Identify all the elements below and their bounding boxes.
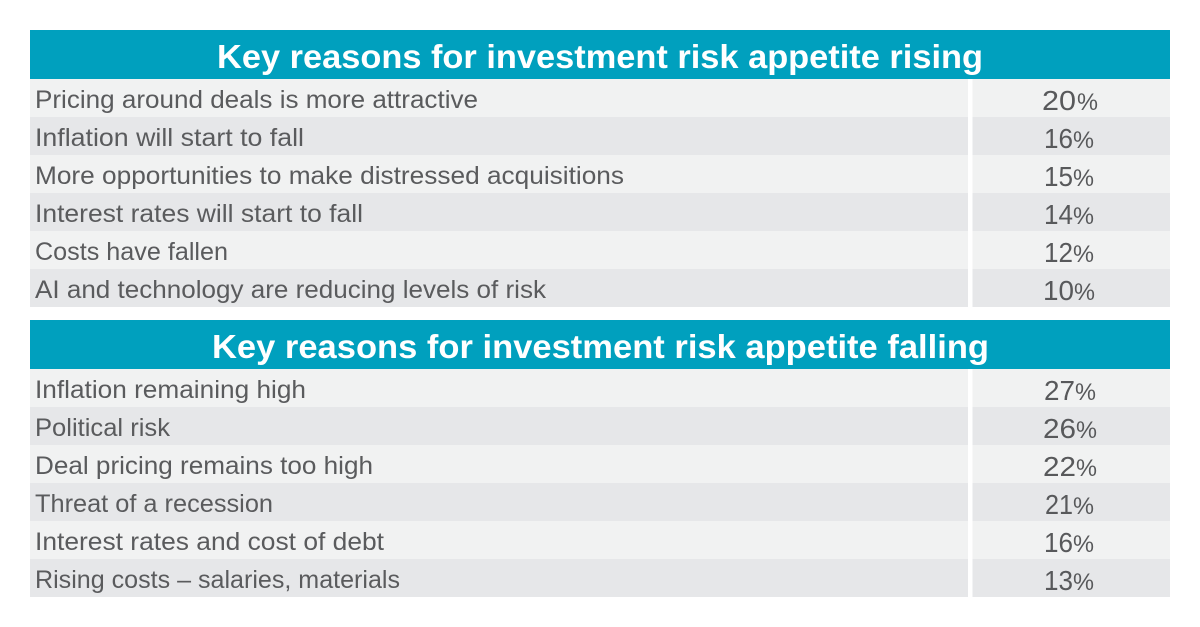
row: deal pricing too high	[30, 445, 1170, 483]
heading: falling	[30, 320, 1170, 369]
row: rising costs: %	[1073, 569, 1094, 596]
row: inflation will start to fall: %	[1073, 127, 1094, 154]
row: inflation will start to fall: 16	[1044, 123, 1073, 154]
row: distressed acquisitions: %	[1073, 165, 1094, 192]
row: interest rates and cost of debt	[30, 521, 1170, 559]
row: threat of a recession: %	[1073, 493, 1094, 520]
row: deal pricing too high: Deal pricing remains too high	[35, 452, 373, 480]
row: political risk	[30, 407, 1170, 445]
heading: rising: Key reasons for investment risk appetite rising	[217, 38, 983, 75]
row: interest rates and cost of debt: %	[1073, 531, 1094, 558]
row: interest rates and cost of debt: Interest rates and cost of debt	[35, 528, 384, 556]
row: rising costs: 13	[1044, 565, 1073, 596]
row: inflation remaining high: Inflation remaining high	[35, 376, 306, 404]
row: AI and technology: AI and technology are reducing levels of risk	[35, 276, 547, 304]
row: distressed acquisitions: 15	[1044, 161, 1073, 192]
row: political risk: 26	[1043, 413, 1076, 444]
row: threat of a recession	[30, 483, 1170, 521]
heading: rising	[30, 30, 1170, 79]
panel: reasons for risk appetite rising	[30, 30, 1170, 307]
row: pricing around deals	[30, 79, 1170, 117]
row: political risk: Political risk	[35, 414, 170, 442]
row: interest rates will start to fall: %	[1073, 203, 1094, 230]
row: interest rates will start to fall	[30, 193, 1170, 231]
row: threat of a recession: 21	[1045, 489, 1073, 520]
row: pricing around deals: 20	[1042, 85, 1076, 116]
row: costs have fallen: Costs have fallen	[35, 238, 228, 266]
row: costs have fallen	[30, 231, 1170, 269]
row: inflation will start to fall: Inflation will start to fall	[35, 124, 304, 152]
row: interest rates will start to fall: Interest rates will start to fall	[35, 200, 363, 228]
row: interest rates and cost of debt: 16	[1044, 527, 1073, 558]
row: distressed acquisitions	[30, 155, 1170, 193]
row: political risk: %	[1076, 417, 1097, 444]
row: threat of a recession: Threat of a recession	[35, 490, 273, 518]
row: distressed acquisitions: More opportunities to make distressed acquisitions	[35, 162, 624, 190]
row: deal pricing too high: 22	[1043, 451, 1076, 482]
row: deal pricing too high: %	[1076, 455, 1097, 482]
row: inflation remaining high	[30, 369, 1170, 407]
row: AI and technology: %	[1074, 279, 1095, 306]
row: costs have fallen: %	[1073, 241, 1094, 268]
row: inflation remaining high: %	[1075, 379, 1096, 406]
row: costs have fallen: 12	[1044, 237, 1073, 268]
row: AI and technology: 10	[1043, 275, 1074, 306]
row: interest rates will start to fall: 14	[1044, 199, 1073, 230]
panel: reasons for risk appetite falling	[30, 320, 1170, 597]
row: rising costs	[30, 559, 1170, 597]
row: inflation remaining high: 27	[1044, 375, 1075, 406]
row: pricing around deals: %	[1077, 89, 1098, 116]
row: AI and technology	[30, 269, 1170, 307]
row: rising costs: Rising costs – salaries, materials	[35, 566, 400, 594]
row: pricing around deals: Pricing around deals is more attractive	[35, 86, 478, 114]
row: inflation will start to fall	[30, 117, 1170, 155]
heading: falling: Key reasons for investment risk appetite falling	[212, 328, 989, 365]
